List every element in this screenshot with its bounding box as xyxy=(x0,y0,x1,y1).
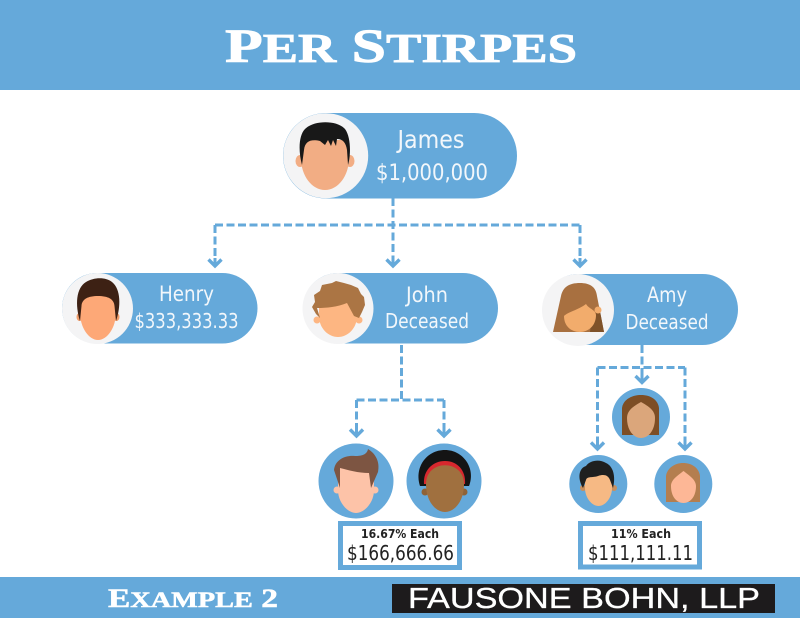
icon: Henry face xyxy=(76,278,120,340)
logo: Fausone Bohn: FAUSONE BOHN, LLP xyxy=(408,583,760,615)
node: Henry xyxy=(62,273,258,344)
header banner xyxy=(0,0,800,90)
avatar: Amy child left xyxy=(569,455,627,513)
icon: John face xyxy=(312,281,365,337)
callout: 11% each xyxy=(580,524,700,567)
node: John xyxy=(302,273,498,344)
node: John: Deceased xyxy=(385,309,469,333)
icon: James face xyxy=(296,122,354,190)
header banner: PER S TIRPES xyxy=(225,20,577,73)
node: Amy: Deceased xyxy=(626,310,708,334)
avatar: John child 1 xyxy=(318,444,394,518)
avatar: Amy child right xyxy=(654,455,712,513)
connector: John to grandchildren xyxy=(350,345,450,436)
connector: Amy to grandchildren xyxy=(591,345,692,449)
node: Henry: $333,333.33 xyxy=(134,309,238,333)
node: John: John xyxy=(404,283,448,307)
node: James: James xyxy=(396,125,464,154)
callout: 16.67% each xyxy=(340,524,460,568)
icon: Amy face xyxy=(553,283,604,332)
avatar: Amy child top xyxy=(612,388,670,446)
footer banner xyxy=(0,577,800,618)
connector: James to children xyxy=(208,198,586,266)
node: Henry: Henry xyxy=(159,282,214,306)
callout: 16.67% each: 16.67% Each xyxy=(361,526,439,541)
node: Amy: Amy xyxy=(647,283,687,307)
footer banner: EXAMPLE 2 xyxy=(108,584,278,613)
callout: 11% each: 11% Each xyxy=(611,526,671,541)
avatar: John child 2 xyxy=(406,444,482,518)
callout: 16.67% each: $166,666.66 xyxy=(347,541,454,565)
node: Amy xyxy=(542,274,738,346)
callout: 11% each: $111,111.11 xyxy=(588,541,693,565)
node: James: $1,000,000 xyxy=(376,161,488,186)
node: James xyxy=(283,113,517,198)
